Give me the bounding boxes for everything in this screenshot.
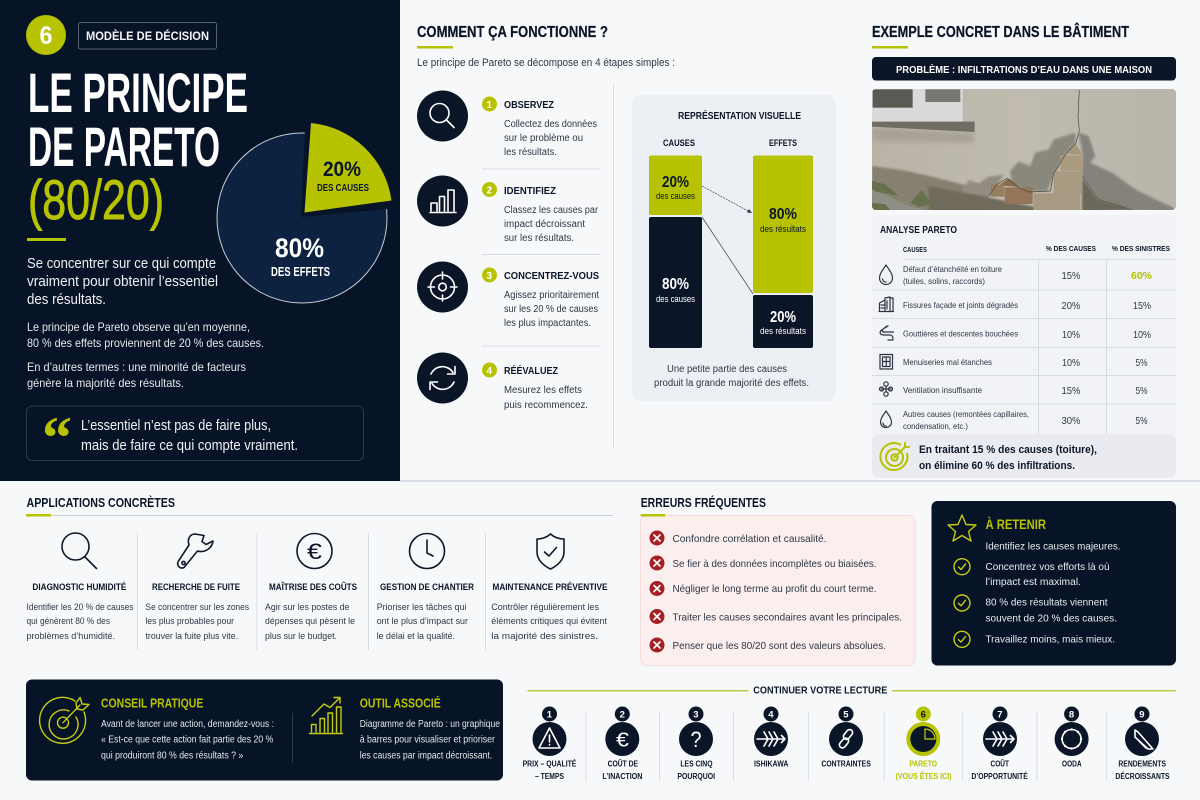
step 1: OBSERVEZ [504,100,554,111]
causes bar: des causes [656,191,695,201]
badge: number 6 [26,15,66,55]
item 2: € [616,730,629,752]
step 1: sur le problème ou [504,133,583,144]
item 1: PRIX – QUALITÉ [523,760,577,769]
step 2: impact décroissant [504,219,585,230]
application 4: le délai et la qualité. [377,631,455,642]
row 4: 10% [1062,357,1080,369]
table: Pareto analysis: ANALYSE PARETO [880,225,957,236]
row 1: (tuiles, solins, raccords) [903,276,985,286]
tip text: qui produiront 80 % des résultats ? » [101,750,244,761]
takeaway list: souvent de 20 % des causes. [986,613,1117,625]
application 2: trouver la fuite plus vite. [146,631,238,642]
panel: frequent errors [640,495,915,666]
panel: tip and tool [26,680,503,780]
quote [26,405,364,471]
step 2 [417,176,599,244]
item 6: current [896,706,952,781]
item 9 [1115,706,1170,781]
application 4: GESTION DE CHANTIER [380,582,474,592]
panel: visual representation: CAUSES [663,138,695,148]
step 1: 1 [486,100,492,111]
item 9: RENDEMENTS [1118,760,1167,769]
step 3: 3 [486,271,492,282]
tag: model category: MODÈLE DE DÉCISION [86,30,209,43]
tool text: Diagramme de Pareto : un graphique [360,719,500,730]
tip text: « Est-ce que cette action fait partie des 20 % [101,735,273,746]
panel: hero [0,0,400,481]
icon: bar chart with arrow [310,698,342,734]
takeaway list: Concentrez vos efforts là où [986,561,1110,573]
heading: EXEMPLE CONCRET DANS LE BÂTIMENT [872,22,1129,41]
error 4: Traiter les causes secondaires avant les principales. [672,612,902,624]
application 2: les plus probables pour [146,616,234,627]
error 3 [650,581,876,596]
application 3: Agir sur les postes de [265,602,350,613]
subtitle: Se concentrer sur ce qui compte [27,256,216,272]
item 8 [1055,706,1089,769]
subtitle: des résultats. [27,292,106,308]
step 4: 4 [486,366,492,377]
application 5: Contrôler régulièrement les [491,602,599,613]
error 2 [650,556,876,570]
error 5: Penser que les 80/20 sont des valeurs absolues. [672,640,886,652]
panel: building example [872,22,1176,478]
application 3: plus sur le budget. [265,631,337,642]
application 4 [377,534,474,642]
causes bar [649,156,702,348]
error 3: Négliger le long terme au profit du court terme. [672,583,876,595]
item 3: LES CINQ [680,760,712,769]
row 5: 15% [1062,385,1080,397]
panel: key takeaways [932,501,1176,666]
application 1: Identifier les 20 % de causes [26,602,134,613]
table: Pareto analysis: % DES SINISTRES [1112,244,1170,253]
effects bar: 80% [769,206,797,223]
application 4: Prioriser les tâches qui [377,602,466,613]
application 3: dépenses qui pèsent le [265,616,355,627]
takeaway list: l’impact est maximal. [986,576,1081,588]
pie chart: DES CAUSES [317,182,369,194]
heading: ERREURS FRÉQUENTES [641,495,766,510]
row 4: Menuiseries mal étanches [903,357,992,367]
causes bar: 80% [662,276,689,293]
callout: key result: En traitant 15 % des causes (toiture), [919,444,1097,456]
error 1 [650,530,826,546]
row 5 [880,382,1148,397]
causes bar: des causes [656,294,695,304]
step 4: puis recommencez. [504,400,588,411]
table: Pareto analysis: % DES CAUSES [1046,244,1096,253]
application 5 [491,534,608,642]
item 6: current: (VOUS ÊTES ICI) [896,772,952,781]
quote: mais de faire ce qui compte vraiment. [81,438,298,454]
item 7: D’OPPORTUNITÉ [971,772,1028,781]
panel: how it works [417,24,836,448]
pie chart: 80% [275,233,324,263]
item 3: 3 [693,710,699,720]
step 1: Collectez des données [504,119,597,130]
heading: À RETENIR [986,517,1046,532]
row 1: 15% [1062,270,1080,282]
table: Pareto analysis: CAUSES [903,247,927,254]
step 4: Mesurez les effets [504,385,582,396]
effects bar: des résultats [760,224,806,234]
subtitle [27,256,218,308]
panel: continue reading [523,686,1176,781]
row 4: 5% [1136,357,1148,369]
item 5: 5 [843,710,849,720]
item 7: COÛT [990,760,1009,769]
step 4 [417,352,588,411]
tool text: à barres pour visualiser et prioriser [360,735,496,746]
application 3 [265,534,357,642]
row 6 [880,409,1148,431]
error 1: Confondre corrélation et causalité. [672,533,826,545]
row 1 [880,264,1153,286]
application 2 [146,534,249,642]
step 2: 2 [486,186,492,196]
step 3: les plus impactantes. [504,318,591,329]
pie chart: DES EFFETS [271,264,330,279]
item 2: 2 [620,710,625,720]
photo: damp cracked wall [872,86,1176,212]
application 1 [26,533,134,642]
item 6: current: PARETO [909,760,937,769]
row 3: 10% [1062,329,1080,341]
item 2: COÛT DE [608,760,639,769]
item 6: current: 6 [921,710,926,720]
title: DE PARETO [28,115,220,178]
item 8: 8 [1069,710,1074,720]
row 2 [879,297,1151,312]
panel: visual representation [632,95,836,401]
item 4: ISHIKAWA [754,760,789,769]
item 9: DÉCROISSANTS [1115,772,1170,781]
title: LE PRINCIPE [28,61,248,124]
callout: key result: on élimine 60 % des infiltrations. [919,460,1075,472]
intro text: En d’autres termes : une minorité de facteurs [27,360,246,374]
takeaway list [986,540,1120,646]
title: (80/20) [28,168,164,231]
pie chart [217,123,392,303]
arrows [702,186,753,294]
item 7 [971,706,1028,781]
item 4: 4 [768,710,774,720]
row 6: 30% [1062,415,1080,427]
heading: COMMENT ÇA FONCTIONNE ? [417,24,608,41]
step 3: Agissez prioritairement [504,290,599,301]
error 4 [650,609,902,624]
intro text [27,320,264,390]
problem banner: PROBLÈME : INFILTRATIONS D’EAU DANS UNE MAISON [896,63,1152,76]
subtitle: vraiment pour obtenir l’essentiel [27,274,218,290]
effects bar [753,156,813,348]
item 1 [523,706,577,781]
problem banner [872,57,1176,80]
error 5 [650,638,886,652]
intro line: Le principe de Pareto se décompose en 4 étapes simples : [417,57,675,69]
row 2: Fissures façade et joints dégradés [903,300,1018,310]
title [28,61,248,231]
application 2: RECHERCHE DE FUITE [152,582,240,592]
table: Pareto analysis [872,215,1176,437]
pie chart: 20% [323,158,361,181]
item 2: L’INACTION [602,772,642,781]
caption: Une petite partie des causes [667,364,787,375]
application 3: MAÎTRISE DES COÛTS [269,581,357,592]
tip text: CONSEIL PRATIQUE [101,696,203,710]
application 2: Se concentrer sur les zones [146,602,249,613]
row 6: 5% [1136,415,1148,427]
row 2: 15% [1133,300,1151,312]
item 7: 7 [997,710,1003,720]
item 1: 1 [547,710,553,720]
tag: model category [78,22,216,49]
panel: visual representation: REPRÉSENTATION VISUELLE [678,109,801,122]
tool text: OUTIL ASSOCIÉ [360,695,441,710]
row 3: 10% [1133,329,1151,341]
application 5: la majorité des sinistres. [491,631,598,642]
tip text: Avant de lancer une action, demandez-vous : [101,719,274,730]
step 3: sur les 20 % de causes [504,304,598,315]
step 3 [417,262,599,329]
check icons [954,559,970,647]
row 3 [880,326,1151,341]
quote: “ [42,405,72,471]
caption [654,364,809,389]
step 1 [417,90,597,158]
step 3: CONCENTREZ-VOUS [504,271,599,282]
item 5: CONTRAINTES [821,760,871,769]
callout: key result [872,434,1176,478]
item 3: ? [690,727,702,752]
row 3: Gouttières et descentes bouchées [903,328,1018,338]
row 4 [880,354,1148,369]
intro text: 80 % des effets proviennent de 20 % des causes. [27,336,264,350]
row 5: Ventilation insuffisante [903,385,982,395]
item 5 [821,706,871,769]
icon: target [40,697,89,743]
step 1: les résultats. [504,147,557,158]
row 6: Autres causes (remontées capillaires, [903,409,1029,419]
application 5: éléments critiques qui évitent [491,616,607,627]
step 4: RÉÉVALUEZ [504,364,558,377]
application 1: DIAGNOSTIC HUMIDITÉ [32,582,126,592]
item 3 [677,706,715,781]
intro text: génère la majorité des résultats. [27,376,184,390]
effects bar: des résultats [760,326,806,336]
tool text [360,695,500,761]
heading: APPLICATIONS CONCRÈTES [26,495,175,510]
causes bar: 20% [662,174,689,191]
takeaway list: Identifiez les causes majeures. [986,540,1120,552]
takeaway list: 80 % des résultats viennent [986,597,1108,609]
application 3: € [307,539,322,564]
intro text: Le principe de Pareto observe qu’en moyenne, [27,320,250,334]
row 5: 5% [1136,385,1148,397]
item 3: POURQUOI [677,772,715,781]
item 8: OODA [1062,760,1082,769]
error 2: Se fier à des données incomplètes ou biaisées. [672,558,876,570]
tool text: les causes par impact décroissant. [360,750,492,761]
step 2: IDENTIFIEZ [504,186,556,197]
item 2 [602,706,642,781]
row 1: 60% [1131,270,1153,282]
application 5: MAINTENANCE PRÉVENTIVE [492,582,608,592]
heading [641,495,766,516]
takeaway list: Travaillez moins, mais mieux. [986,634,1115,646]
heading: CONTINUER VOTRE LECTURE [753,686,888,696]
application 1: qui génèrent 80 % des [26,616,110,627]
row 2: 20% [1062,300,1080,312]
effects bar: 20% [770,309,796,326]
row 1: Défaut d’étanchéité en toiture [903,264,1002,274]
icon: star [948,515,976,541]
step 2: sur les résultats. [504,233,574,244]
badge: number 6: 6 [40,22,52,50]
item 9: 9 [1139,710,1145,720]
item 4 [754,706,789,769]
row 6: condensation, etc.) [903,421,968,431]
quote: L’essentiel n’est pas de faire plus, [81,418,271,434]
tip text [101,696,274,761]
application 4: ont le plus d’impact sur [377,616,468,627]
item 1: – TEMPS [535,772,565,781]
panel: concrete applications [26,495,613,650]
panel: visual representation: EFFETS [769,138,797,148]
step 2: Classez les causes par [504,205,599,216]
caption: produit la grande majorité des effets. [654,378,809,389]
application 1: problèmes d’humidité. [26,631,115,642]
